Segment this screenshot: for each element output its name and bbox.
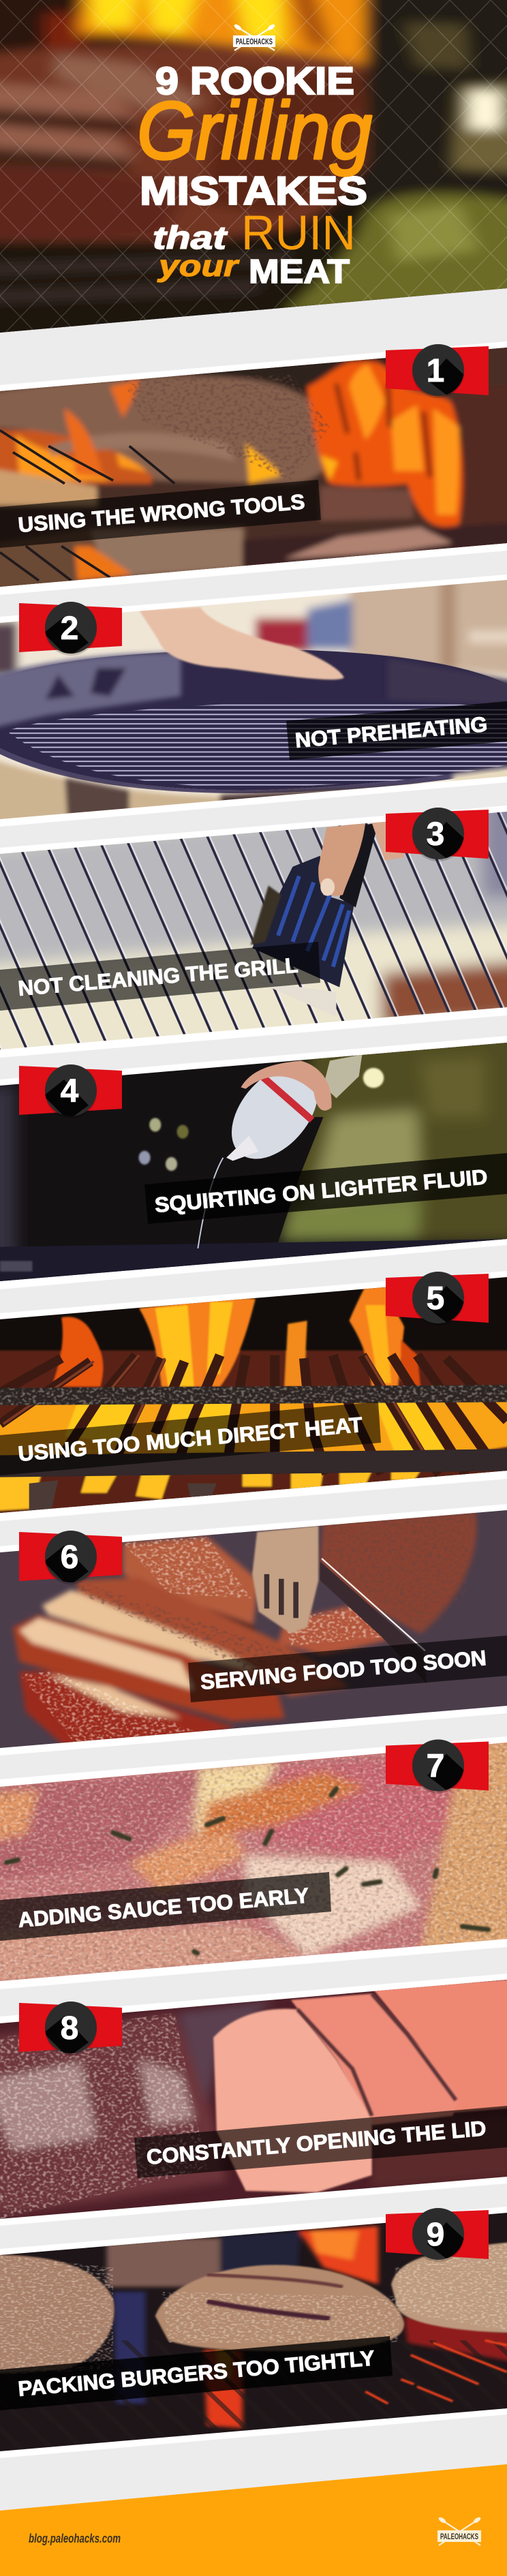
title: RUIN <box>241 206 356 260</box>
number badge 4: 4 <box>61 1073 79 1109</box>
label: using the wrong tools: USING THE WRONG TOOLS <box>17 490 306 537</box>
footer <box>0 2464 507 2576</box>
photo: sliced glazed meat with fork and knife <box>0 1505 507 1755</box>
photo: flames through grill grate <box>0 1268 507 1538</box>
label: using too much direct heat: USING TOO MUCH DIRECT HEAT <box>17 1413 363 1466</box>
title: your <box>157 249 240 283</box>
photo: sliced roast beef <box>0 1972 507 2225</box>
header photo: steak on flames with lattice overlay <box>0 0 507 359</box>
title: that <box>153 219 228 256</box>
title: Grilling <box>137 85 372 177</box>
number badge 6: 6 <box>61 1539 78 1576</box>
number badge 1: 1 <box>427 353 444 389</box>
number badge 3 <box>386 808 489 868</box>
photo: burgers on a flaming grill <box>0 2209 507 2462</box>
label: not cleaning the grill <box>0 942 320 1011</box>
panel 7: adding sauce too early <box>0 1725 507 2000</box>
number badge 5 <box>386 1272 489 1332</box>
label: packing burgers too tightly: PACKING BURGERS TOO TIGHTLY <box>17 2346 375 2401</box>
number badge 9: 9 <box>427 2217 444 2253</box>
label: using the wrong tools <box>0 480 321 548</box>
label: packing burgers too tightly <box>0 2336 393 2410</box>
number badge 6 <box>19 1531 122 1586</box>
photo: marinated raw meat with herbs <box>0 1725 507 2000</box>
label: constantly opening the lid <box>134 2106 507 2178</box>
title: MISTAKES <box>140 169 367 213</box>
title <box>137 59 372 290</box>
number badge 8: 8 <box>61 2010 78 2046</box>
panel 5: using too much direct heat <box>0 1268 507 1538</box>
photo: ribs over flames <box>0 348 507 587</box>
label: squirting on lighter fluid: SQUIRTING ON LIGHTER FLUID <box>154 1165 489 1217</box>
logo: PaleoHacks crossed spatulas: PALEOHACKS <box>236 38 273 46</box>
number badge 8 <box>19 2002 122 2057</box>
panel 1: using the wrong tools <box>0 339 507 609</box>
number badge 4 <box>19 1064 122 1120</box>
panel 6: serving food too soon <box>0 1504 507 1755</box>
panel 9: packing burgers too tightly <box>0 2207 507 2462</box>
panel 3: not cleaning the grill <box>0 785 507 1067</box>
number badge 2 <box>19 602 122 658</box>
label: adding sauce too early: ADDING SAUCE TOO EARLY <box>17 1884 310 1932</box>
label: serving food too soon: SERVING FOOD TOO SOON <box>200 1646 487 1694</box>
panel 4: squirting on lighter fluid <box>0 1026 507 1305</box>
footer url: blog.paleohacks.com <box>29 2532 121 2545</box>
title: MEAT <box>249 254 350 290</box>
label: squirting on lighter fluid <box>144 1153 507 1224</box>
panel 8: constantly opening the lid <box>0 1972 507 2226</box>
label: not preheating <box>286 701 507 760</box>
footer logo: PALEOHACKS <box>440 2533 478 2541</box>
label: serving food too soon <box>188 1636 507 1702</box>
label: using too much direct heat <box>0 1402 381 1475</box>
panel 2: not preheating <box>0 565 507 831</box>
title: 9 ROOKIE <box>155 59 354 103</box>
header <box>0 0 507 359</box>
photo: hand over kettle grill <box>0 580 507 819</box>
photo: lighter fluid bottle over grill <box>0 1026 507 1305</box>
label: not cleaning the grill: NOT CLEANING THE GRILL <box>17 953 299 1000</box>
number badge 9 <box>386 2208 489 2268</box>
photo: brush cleaning grill bars <box>0 785 507 1067</box>
footer logo <box>437 2516 482 2545</box>
label: constantly opening the lid: CONSTANTLY OPENING THE LID <box>146 2116 487 2169</box>
number badge 7: 7 <box>427 1749 444 1784</box>
number badge 3: 3 <box>427 816 444 853</box>
label: adding sauce too early <box>0 1872 331 1941</box>
number badge 2: 2 <box>61 611 78 647</box>
number badge 1 <box>386 344 489 398</box>
number badge 7 <box>386 1739 489 1799</box>
logo: PaleoHacks crossed spatulas <box>233 23 276 50</box>
label: not preheating: NOT PREHEATING <box>294 712 489 752</box>
number badge 5: 5 <box>427 1281 444 1317</box>
